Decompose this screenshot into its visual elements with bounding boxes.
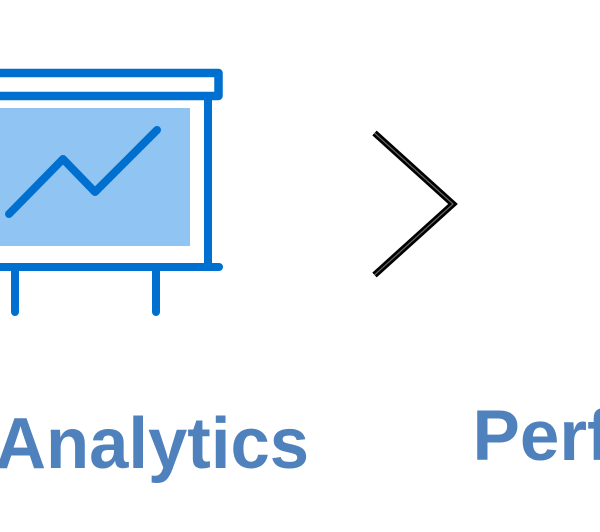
arrow: chevron right — [374, 133, 453, 275]
icon: presentation board with line chart — [0, 73, 219, 312]
heading: Analytics: Analytics — [0, 404, 309, 484]
